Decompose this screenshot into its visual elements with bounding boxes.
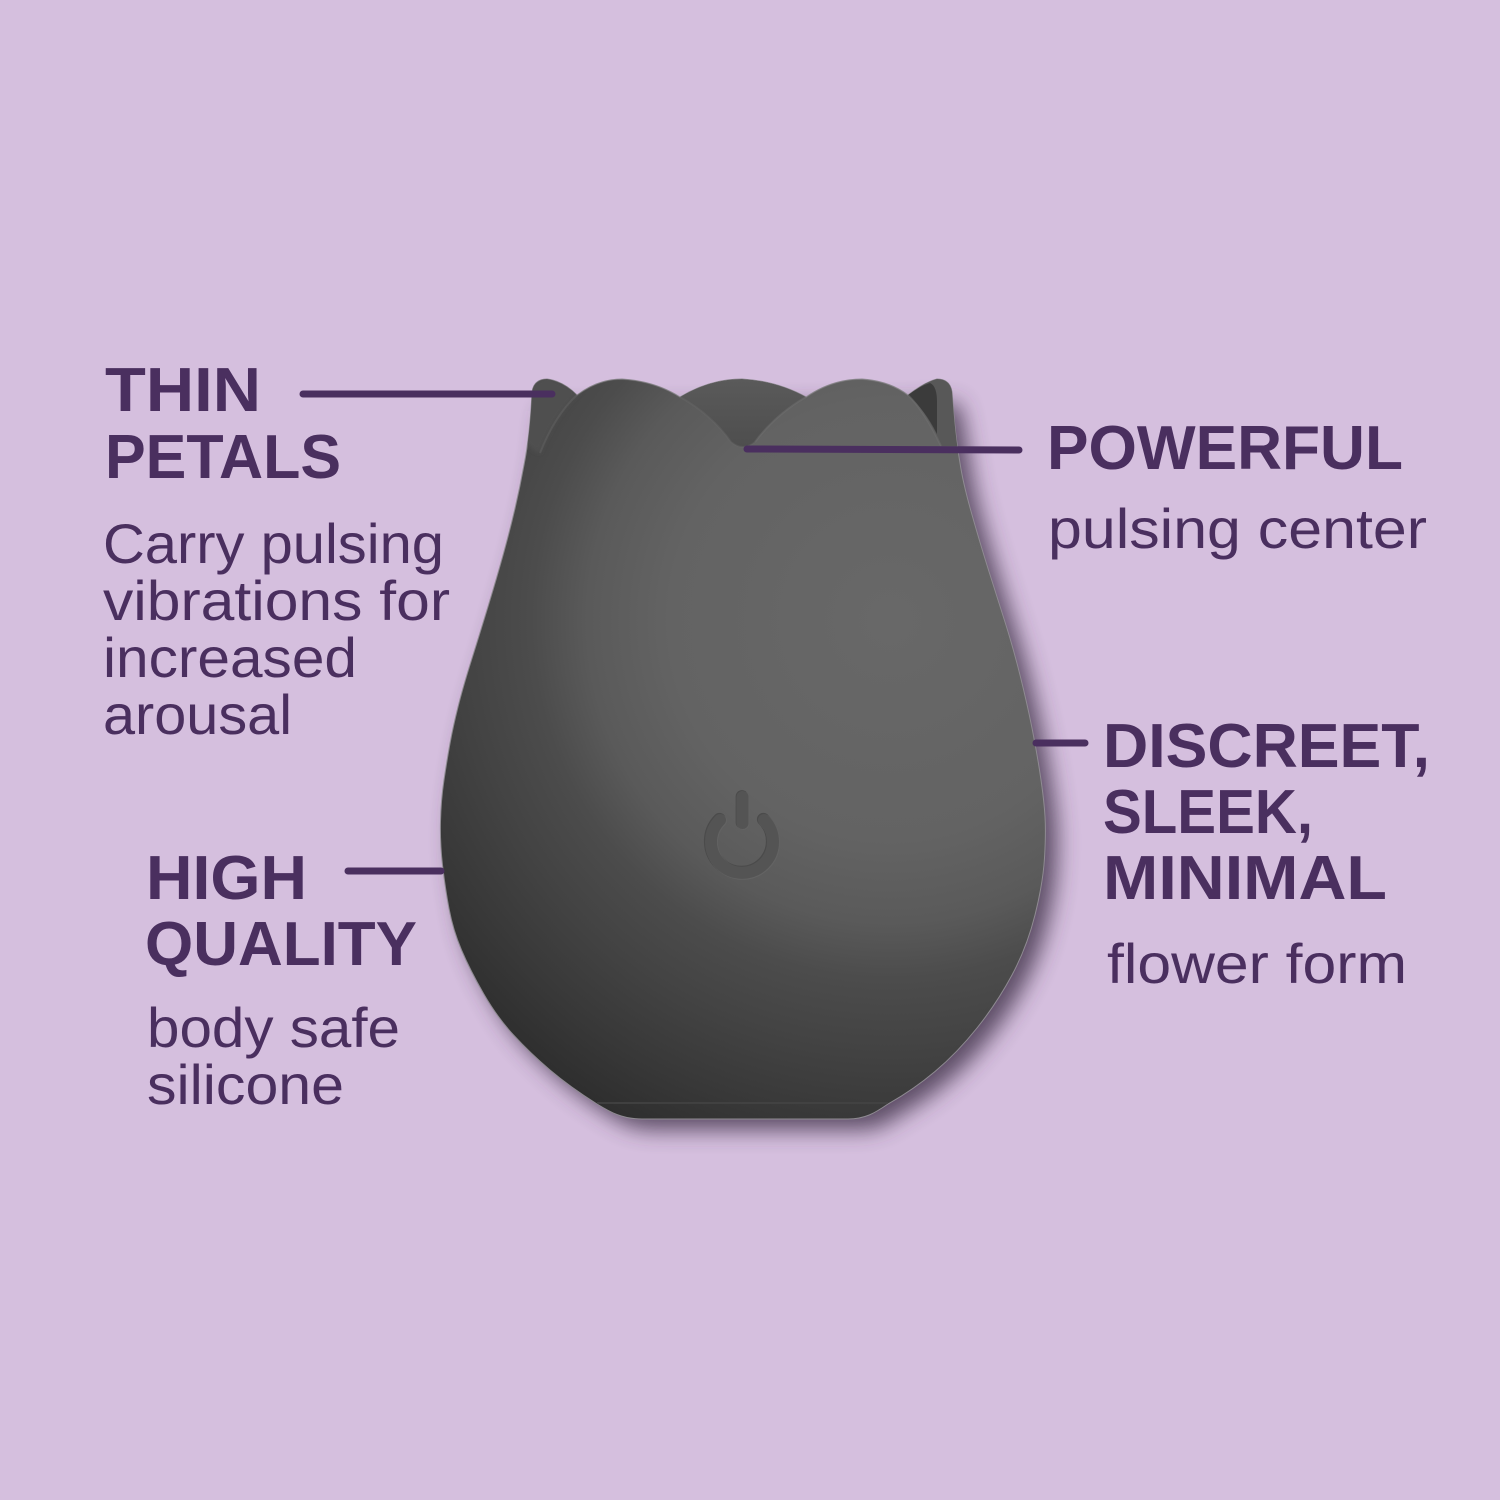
text: carry pulsing vibrations: Carry pulsing: [103, 512, 444, 575]
leader line: thin petals: [303, 390, 552, 398]
text: carry pulsing vibrations: increased: [103, 626, 357, 689]
text: body safe silicone: body safe: [147, 996, 400, 1059]
base seam: [597, 1102, 888, 1104]
leader line: high quality: [348, 868, 441, 874]
text: carry pulsing vibrations: arousal: [103, 683, 292, 746]
callout: discreet: [1103, 712, 1430, 995]
petal details: [524, 375, 962, 453]
leader line: discreet: [1036, 740, 1085, 746]
callout: powerful: [1047, 414, 1427, 560]
heading: powerful: POWERFUL: [1047, 414, 1403, 483]
callout: high quality: [145, 844, 417, 1116]
heading: discreet, sleek, minimal: SLEEK,: [1103, 778, 1313, 847]
heading: high quality: QUALITY: [145, 910, 417, 979]
text: pulsing center: pulsing center: [1048, 497, 1427, 560]
back petal: left tip: [527, 379, 580, 448]
text: flower form: flower form: [1107, 932, 1407, 995]
product: flower-shaped device: [440, 375, 1057, 1130]
heading: discreet, sleek, minimal: DISCREET,: [1103, 712, 1430, 781]
text: carry pulsing vibrations: vibrations for: [103, 569, 450, 632]
leader line: powerful: [747, 449, 1019, 450]
heading: discreet, sleek, minimal: MINIMAL: [1103, 844, 1387, 913]
petal edge: right front: [755, 379, 941, 446]
heading: thin petals: THIN: [105, 356, 261, 425]
product shadow: [452, 403, 1057, 1130]
back petal: right tip interior: [908, 383, 937, 434]
callout: thin petals: [103, 356, 450, 746]
device body: [440, 379, 1045, 1119]
back petal: centre: [680, 379, 806, 447]
petal edge: left front: [540, 379, 755, 453]
icon: power button: [710, 796, 774, 874]
heading: thin petals: PETALS: [105, 423, 341, 492]
heading: high quality: HIGH: [146, 844, 307, 913]
text: body safe silicone: silicone: [147, 1053, 344, 1116]
back petal: right tip rim: [909, 379, 958, 446]
